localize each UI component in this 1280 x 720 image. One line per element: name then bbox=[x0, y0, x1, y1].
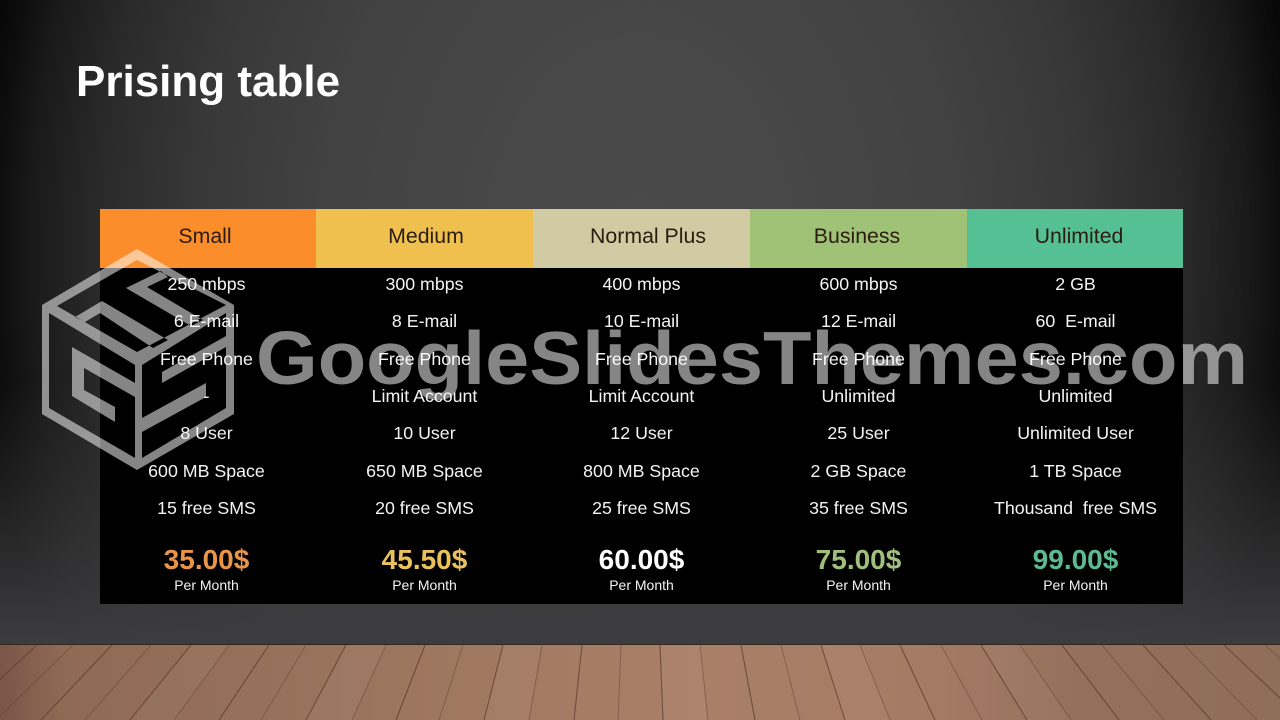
column: Business: 75.00$ bbox=[816, 544, 901, 575]
column: Normal Plus bbox=[583, 274, 700, 593]
column: Unlimited: Unlimited bbox=[1038, 386, 1113, 406]
column: Normal Plus: 400 mbps bbox=[602, 274, 681, 294]
column: Small: - bbox=[204, 386, 209, 406]
column: Small: 35.00$ bbox=[164, 544, 249, 575]
column: Normal Plus: Free Phone bbox=[595, 349, 688, 369]
column: Medium: 45.50$ bbox=[382, 544, 467, 575]
column: Small: Free Phone bbox=[160, 349, 253, 369]
header: Small bbox=[100, 209, 316, 268]
column: Normal Plus: Per Month bbox=[609, 577, 674, 593]
column: Medium: Limit Account bbox=[372, 386, 477, 406]
column: Normal Plus: 10 E-mail bbox=[604, 311, 679, 331]
column: Small: 6 E-mail bbox=[174, 311, 239, 331]
column: Unlimited: Free Phone bbox=[1029, 349, 1122, 369]
column: Business: 2 GB Space bbox=[811, 461, 906, 481]
column: Small: Per Month bbox=[174, 577, 239, 593]
column: Business: 35 free SMS bbox=[809, 498, 908, 518]
column: Medium bbox=[366, 274, 483, 593]
column: Medium: 650 MB Space bbox=[366, 461, 483, 481]
column: Small bbox=[148, 274, 265, 593]
column: Unlimited: 2 GB bbox=[1055, 274, 1096, 294]
wooden floor bbox=[0, 644, 1280, 720]
column: Normal Plus: 60.00$ bbox=[599, 544, 684, 575]
column: Medium: 8 E-mail bbox=[392, 311, 457, 331]
pricing table bbox=[100, 209, 1183, 604]
column: Business: Unlimited bbox=[821, 386, 896, 406]
column: Business bbox=[809, 274, 908, 593]
column: Normal Plus: Limit Account bbox=[589, 386, 694, 406]
watermark text: GoogleSlidesThemes.com bbox=[256, 316, 1248, 400]
column: Small: 250 mbps bbox=[167, 274, 246, 294]
column: Small: 8 User bbox=[180, 423, 233, 443]
column: Unlimited: Unlimited User bbox=[1017, 423, 1134, 443]
column: Medium: Per Month bbox=[392, 577, 457, 593]
header: Normal Plus bbox=[533, 209, 750, 268]
column: Business: 25 User bbox=[827, 423, 890, 443]
column: Medium: 20 free SMS bbox=[375, 498, 474, 518]
column: Medium: 10 User bbox=[393, 423, 456, 443]
column: Business: 12 E-mail bbox=[821, 311, 896, 331]
column: Medium: Free Phone bbox=[378, 349, 471, 369]
column: Business: Free Phone bbox=[812, 349, 905, 369]
column: Unlimited: 1 TB Space bbox=[1029, 461, 1122, 481]
column: Unlimited: Thousand free SMS bbox=[994, 498, 1157, 518]
header: Medium: Medium bbox=[388, 224, 464, 248]
column: Business: 600 mbps bbox=[819, 274, 898, 294]
column: Normal Plus: 12 User bbox=[610, 423, 673, 443]
column: Unlimited bbox=[994, 274, 1157, 593]
column: Medium: 300 mbps bbox=[385, 274, 464, 294]
column: Business: Per Month bbox=[826, 577, 891, 593]
header: Business: Business bbox=[814, 224, 900, 248]
header: Unlimited bbox=[967, 209, 1183, 268]
header: Unlimited: Unlimited bbox=[1035, 224, 1123, 248]
header: Business bbox=[750, 209, 967, 268]
title: Prising table bbox=[76, 57, 340, 106]
column: Unlimited: 60 E-mail bbox=[1035, 311, 1116, 331]
column: Normal Plus: 25 free SMS bbox=[592, 498, 691, 518]
column: Small: 600 MB Space bbox=[148, 461, 265, 481]
column: Unlimited: Per Month bbox=[1043, 577, 1108, 593]
icon: hexagonal cube logo bbox=[42, 249, 234, 470]
header: Small: Small bbox=[178, 224, 232, 248]
column: Small: 15 free SMS bbox=[157, 498, 256, 518]
column: Normal Plus: 800 MB Space bbox=[583, 461, 700, 481]
header: Medium bbox=[316, 209, 533, 268]
header: Normal Plus: Normal Plus bbox=[590, 224, 706, 248]
column: Unlimited: 99.00$ bbox=[1033, 544, 1118, 575]
